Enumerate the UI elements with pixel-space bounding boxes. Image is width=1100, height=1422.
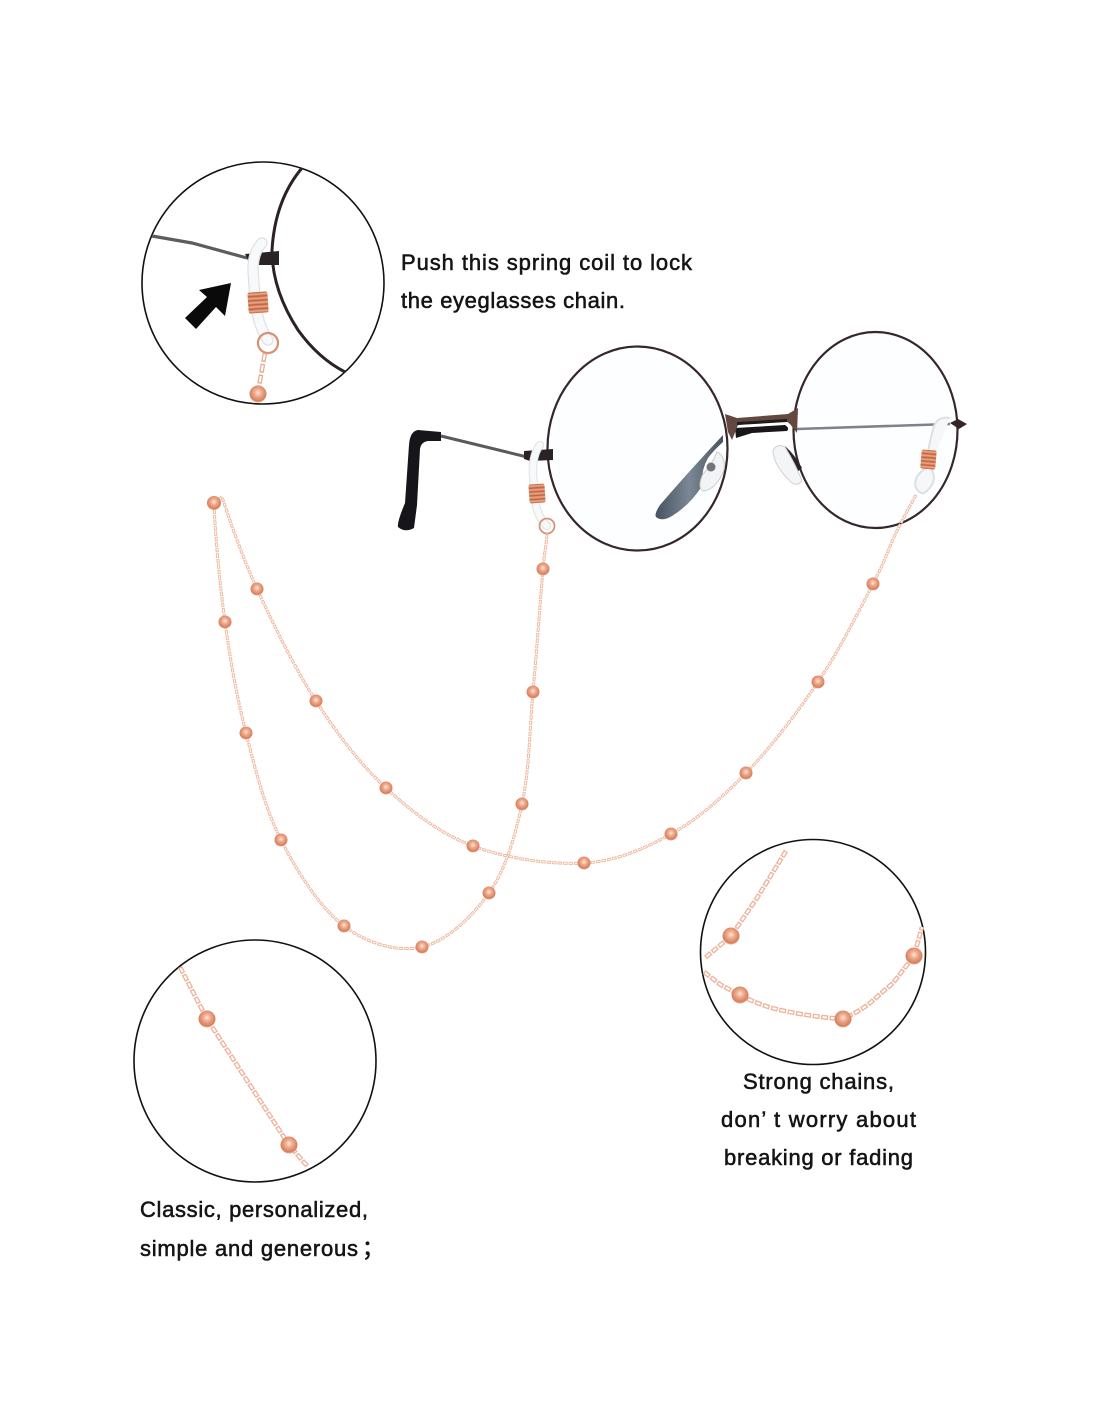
caption: classic: simple and generous: [140, 1236, 358, 1261]
inset: spring coil detail: [142, 162, 384, 404]
inset: classic chain detail: [134, 940, 376, 1182]
caption: strong chains: Strong chains,: [743, 1069, 894, 1094]
hinge: [245, 251, 279, 265]
temple arm: [152, 236, 247, 258]
silicone holder: [253, 243, 268, 340]
inset: strong chains detail: [700, 840, 926, 1064]
caption: strong chains: [721, 1069, 916, 1170]
far temple tip through left lens: [656, 435, 723, 519]
small bead: [250, 386, 266, 402]
beads: [198, 1010, 298, 1154]
beads: [722, 928, 922, 1028]
right silicone holder: [915, 418, 967, 493]
temple arm and black tip: [398, 430, 527, 530]
chain strand left: [214, 497, 547, 949]
far temple seen through lenses: [797, 424, 950, 429]
spring coil: [247, 291, 269, 314]
eyeglasses: [398, 332, 967, 550]
jump ring: [258, 333, 278, 353]
caption: strong chains: breaking or fading: [724, 1145, 913, 1170]
right lens: [794, 332, 958, 528]
upper strand: [705, 851, 786, 958]
arrow: [185, 283, 231, 329]
caption: spring coil: Push this spring coil to lock: [401, 250, 693, 275]
nose pad left: [700, 452, 724, 491]
bridge: [725, 408, 798, 440]
rose gold bead chain: [207, 495, 916, 954]
caption: classic: Classic, personalized,: [140, 1197, 368, 1222]
caption: classic: [140, 1197, 384, 1261]
lower strand: [704, 927, 922, 1019]
chain strand right: [222, 495, 916, 863]
caption: strong chains: don’ t worry about: [721, 1107, 916, 1132]
caption: spring coil: the eyeglasses chain.: [401, 288, 625, 313]
left lens: [548, 346, 728, 550]
small chain links: [259, 353, 265, 386]
left silicone holder: [528, 445, 554, 534]
strand: [180, 967, 308, 1167]
nose pad right: [773, 446, 802, 484]
lens rim arc: [272, 168, 345, 372]
caption: spring coil: [401, 250, 693, 313]
caption: classic: ；: [362, 1236, 384, 1261]
left hinge: [524, 449, 553, 461]
small chain link centres: [259, 353, 265, 386]
chain beads: [207, 496, 880, 954]
